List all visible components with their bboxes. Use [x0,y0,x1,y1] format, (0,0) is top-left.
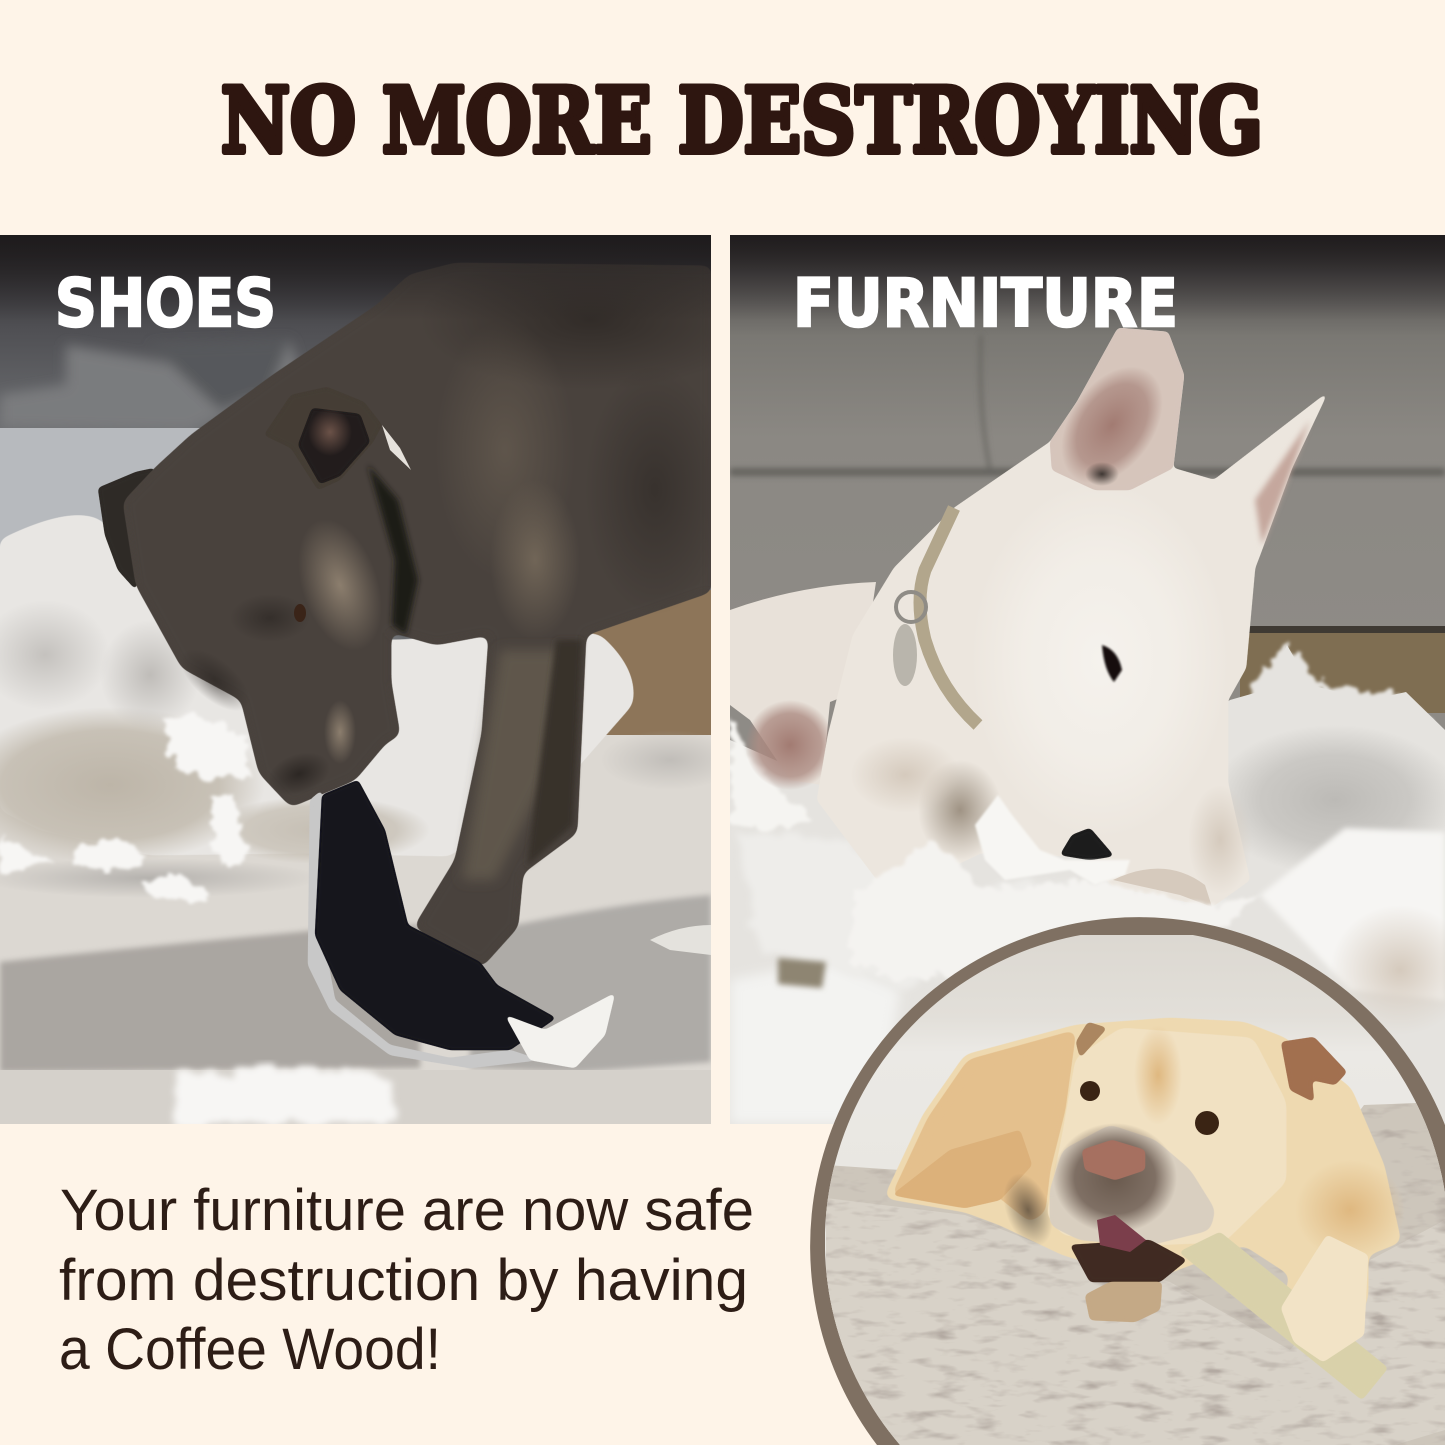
left ear [1050,328,1184,490]
floor shadow left [0,925,420,1072]
body text: a Coffee Wood! [59,1317,441,1382]
label: furniture: FURNITURE [793,265,1178,342]
icon: grey dog [98,250,760,967]
dog silhouette [123,263,711,967]
paw [1113,869,1212,907]
right ear [1255,420,1310,545]
brown ring [810,917,1445,1445]
small paw [1085,1282,1162,1322]
left ear [1076,1022,1105,1056]
top shade right [730,236,1445,308]
icon: torn shoe [308,780,615,1068]
front paw [1281,1235,1368,1362]
panel: furniture photo [730,235,1445,1124]
chew stick [1179,1232,1388,1400]
collar and tag [920,508,978,725]
nose [1060,828,1114,860]
torn pillow [0,516,633,864]
body text: Your furniture are now safe [60,1178,754,1243]
body text: from destruction by having [59,1248,748,1313]
top shade [0,250,711,300]
foreground fluff [850,840,1262,980]
label: shoes: SHOES [55,265,276,342]
eyes [1080,1081,1100,1101]
eye [1102,645,1122,682]
icon: white dog [730,328,1328,907]
stuffing [730,640,1445,1124]
dog ear [264,387,411,490]
icon: tan dog [884,1018,1405,1400]
floor strip [1240,626,1445,713]
blanket on bed [0,340,300,432]
dog nose [276,759,322,790]
dog eye [294,604,306,622]
floor shadow right [470,895,711,1072]
floor [0,730,740,1124]
sofa cushion seams [730,335,1445,472]
torn paper in mouth [975,795,1130,885]
dog bed [826,1102,1445,1445]
dog shading [185,284,702,882]
bed [0,428,200,546]
muzzle [1050,1125,1215,1245]
title: NO MORE DESTROYING [221,68,1263,174]
dark chew area [1070,1240,1187,1282]
basket [590,590,711,738]
stuffing tufts [0,715,395,1124]
circle photo: dog with coffee wood chew [810,917,1445,1445]
panel: shoes photo [0,235,760,1124]
body text [59,1178,754,1382]
right ear [1281,1037,1347,1102]
